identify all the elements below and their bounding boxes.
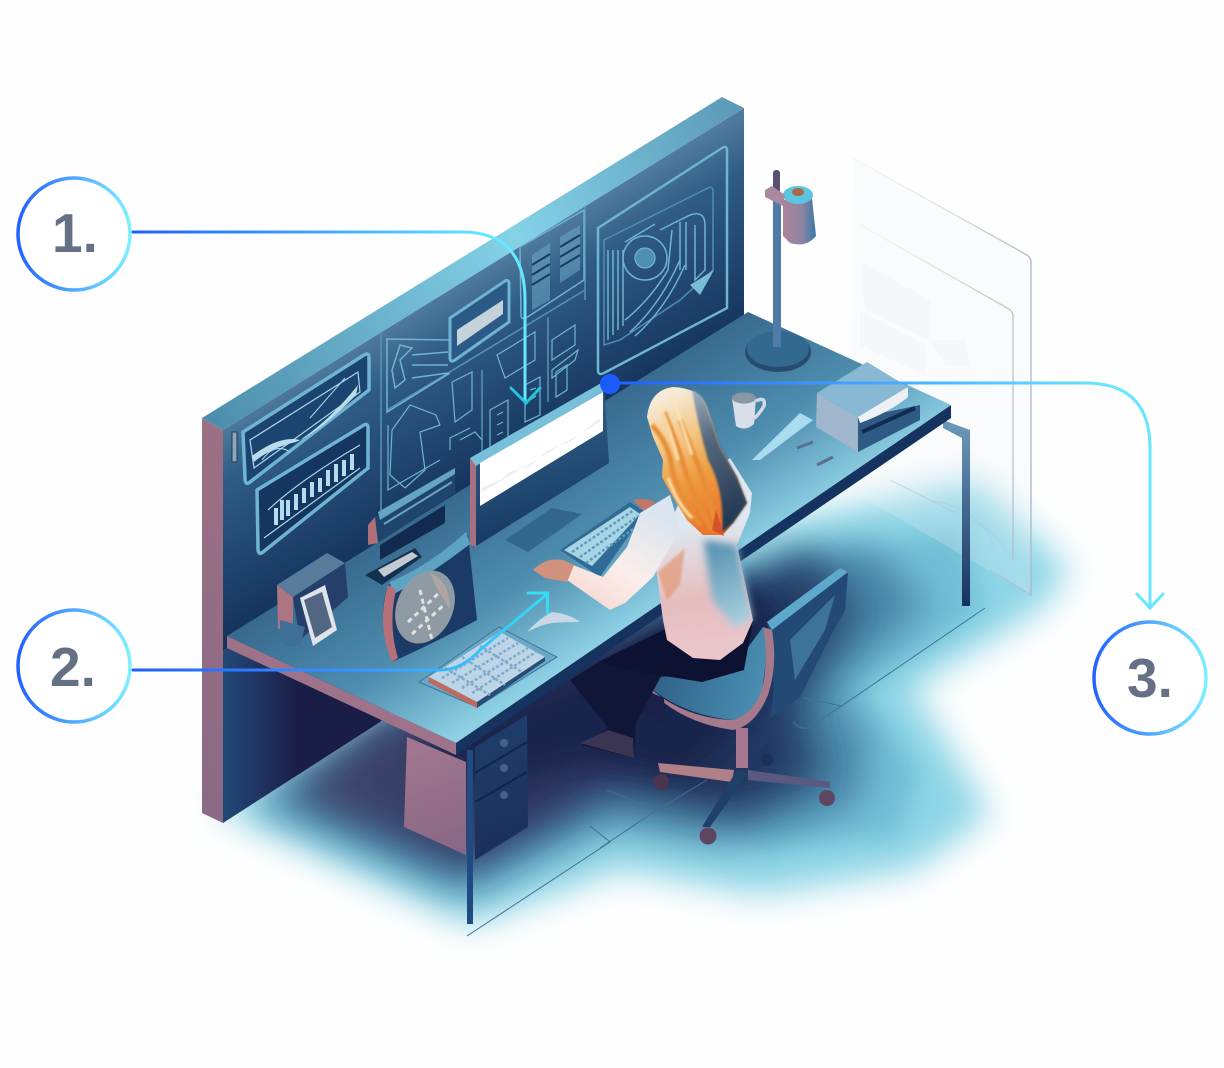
woman keyboard [560,499,655,577]
coffee mug [732,392,764,429]
hips [598,620,753,682]
panel: terrain map [243,354,369,483]
hand [533,559,574,582]
lamp [745,170,816,372]
lamp head [783,198,816,244]
near leg [570,660,670,758]
chair backrest [767,568,848,718]
woman [533,387,753,758]
drawer left face [404,737,466,855]
wall end face [202,418,223,823]
arm [567,495,680,610]
wall front face [223,108,744,650]
chair base [653,728,835,844]
floor outline lines [467,608,985,936]
panel: striped blueprint [520,210,584,319]
floor shadow [215,480,1070,936]
panel: machine schematic [598,147,727,374]
keyboard mat [419,627,557,707]
torso shirt [655,458,753,660]
sketches and small diagrams [388,325,578,490]
drawer unit [404,715,528,860]
mouse [527,612,580,632]
monitor stand [505,508,582,552]
callout circle 1 [18,178,130,290]
monitor body [473,385,609,548]
hair [647,387,747,536]
desk items [277,362,920,708]
monitor bezel top [470,382,606,466]
front keyboard [428,632,545,708]
dividers [381,207,585,525]
paper tray [816,362,920,452]
glass panel behind desk [850,158,1031,595]
callout circle 2: 2. [50,636,96,698]
panel: plant sketch [387,338,450,412]
drawer front face [475,715,528,860]
callout line 2 [133,593,548,670]
callout line 3 [612,383,1163,608]
far leg and shoe [620,680,665,724]
chair seat [643,627,766,720]
clipped bracket on wall [232,432,237,462]
partition wall [202,97,744,823]
callout circle 3 [1094,622,1206,734]
rear small monitor [365,468,455,585]
callout circle 2 [18,610,130,722]
desk legs [467,420,970,924]
lamp pole [773,195,781,347]
desk top [227,312,951,743]
wall lower dark face [223,500,470,823]
desk left edge [227,636,456,755]
panel: skyline [257,424,368,553]
picture frame [300,585,337,646]
callout line 1 [133,232,540,403]
curved tablet device [383,532,477,662]
rear keyboard [365,548,422,585]
monitor edge [470,458,476,548]
blueprint panels [243,147,727,553]
triangle ruler [752,413,813,460]
box organiser [277,553,348,647]
callout origin dot [600,374,620,394]
lamp base [745,332,811,372]
main monitor [470,382,609,552]
desk [227,312,951,755]
callout circle 1: 1. [52,202,98,264]
monitor screen [480,392,603,506]
wall top face [202,97,744,430]
panel: small screen [450,280,509,361]
callout circle 3: 3. [1127,647,1173,709]
chair [643,568,848,844]
desk right edge [456,405,951,755]
